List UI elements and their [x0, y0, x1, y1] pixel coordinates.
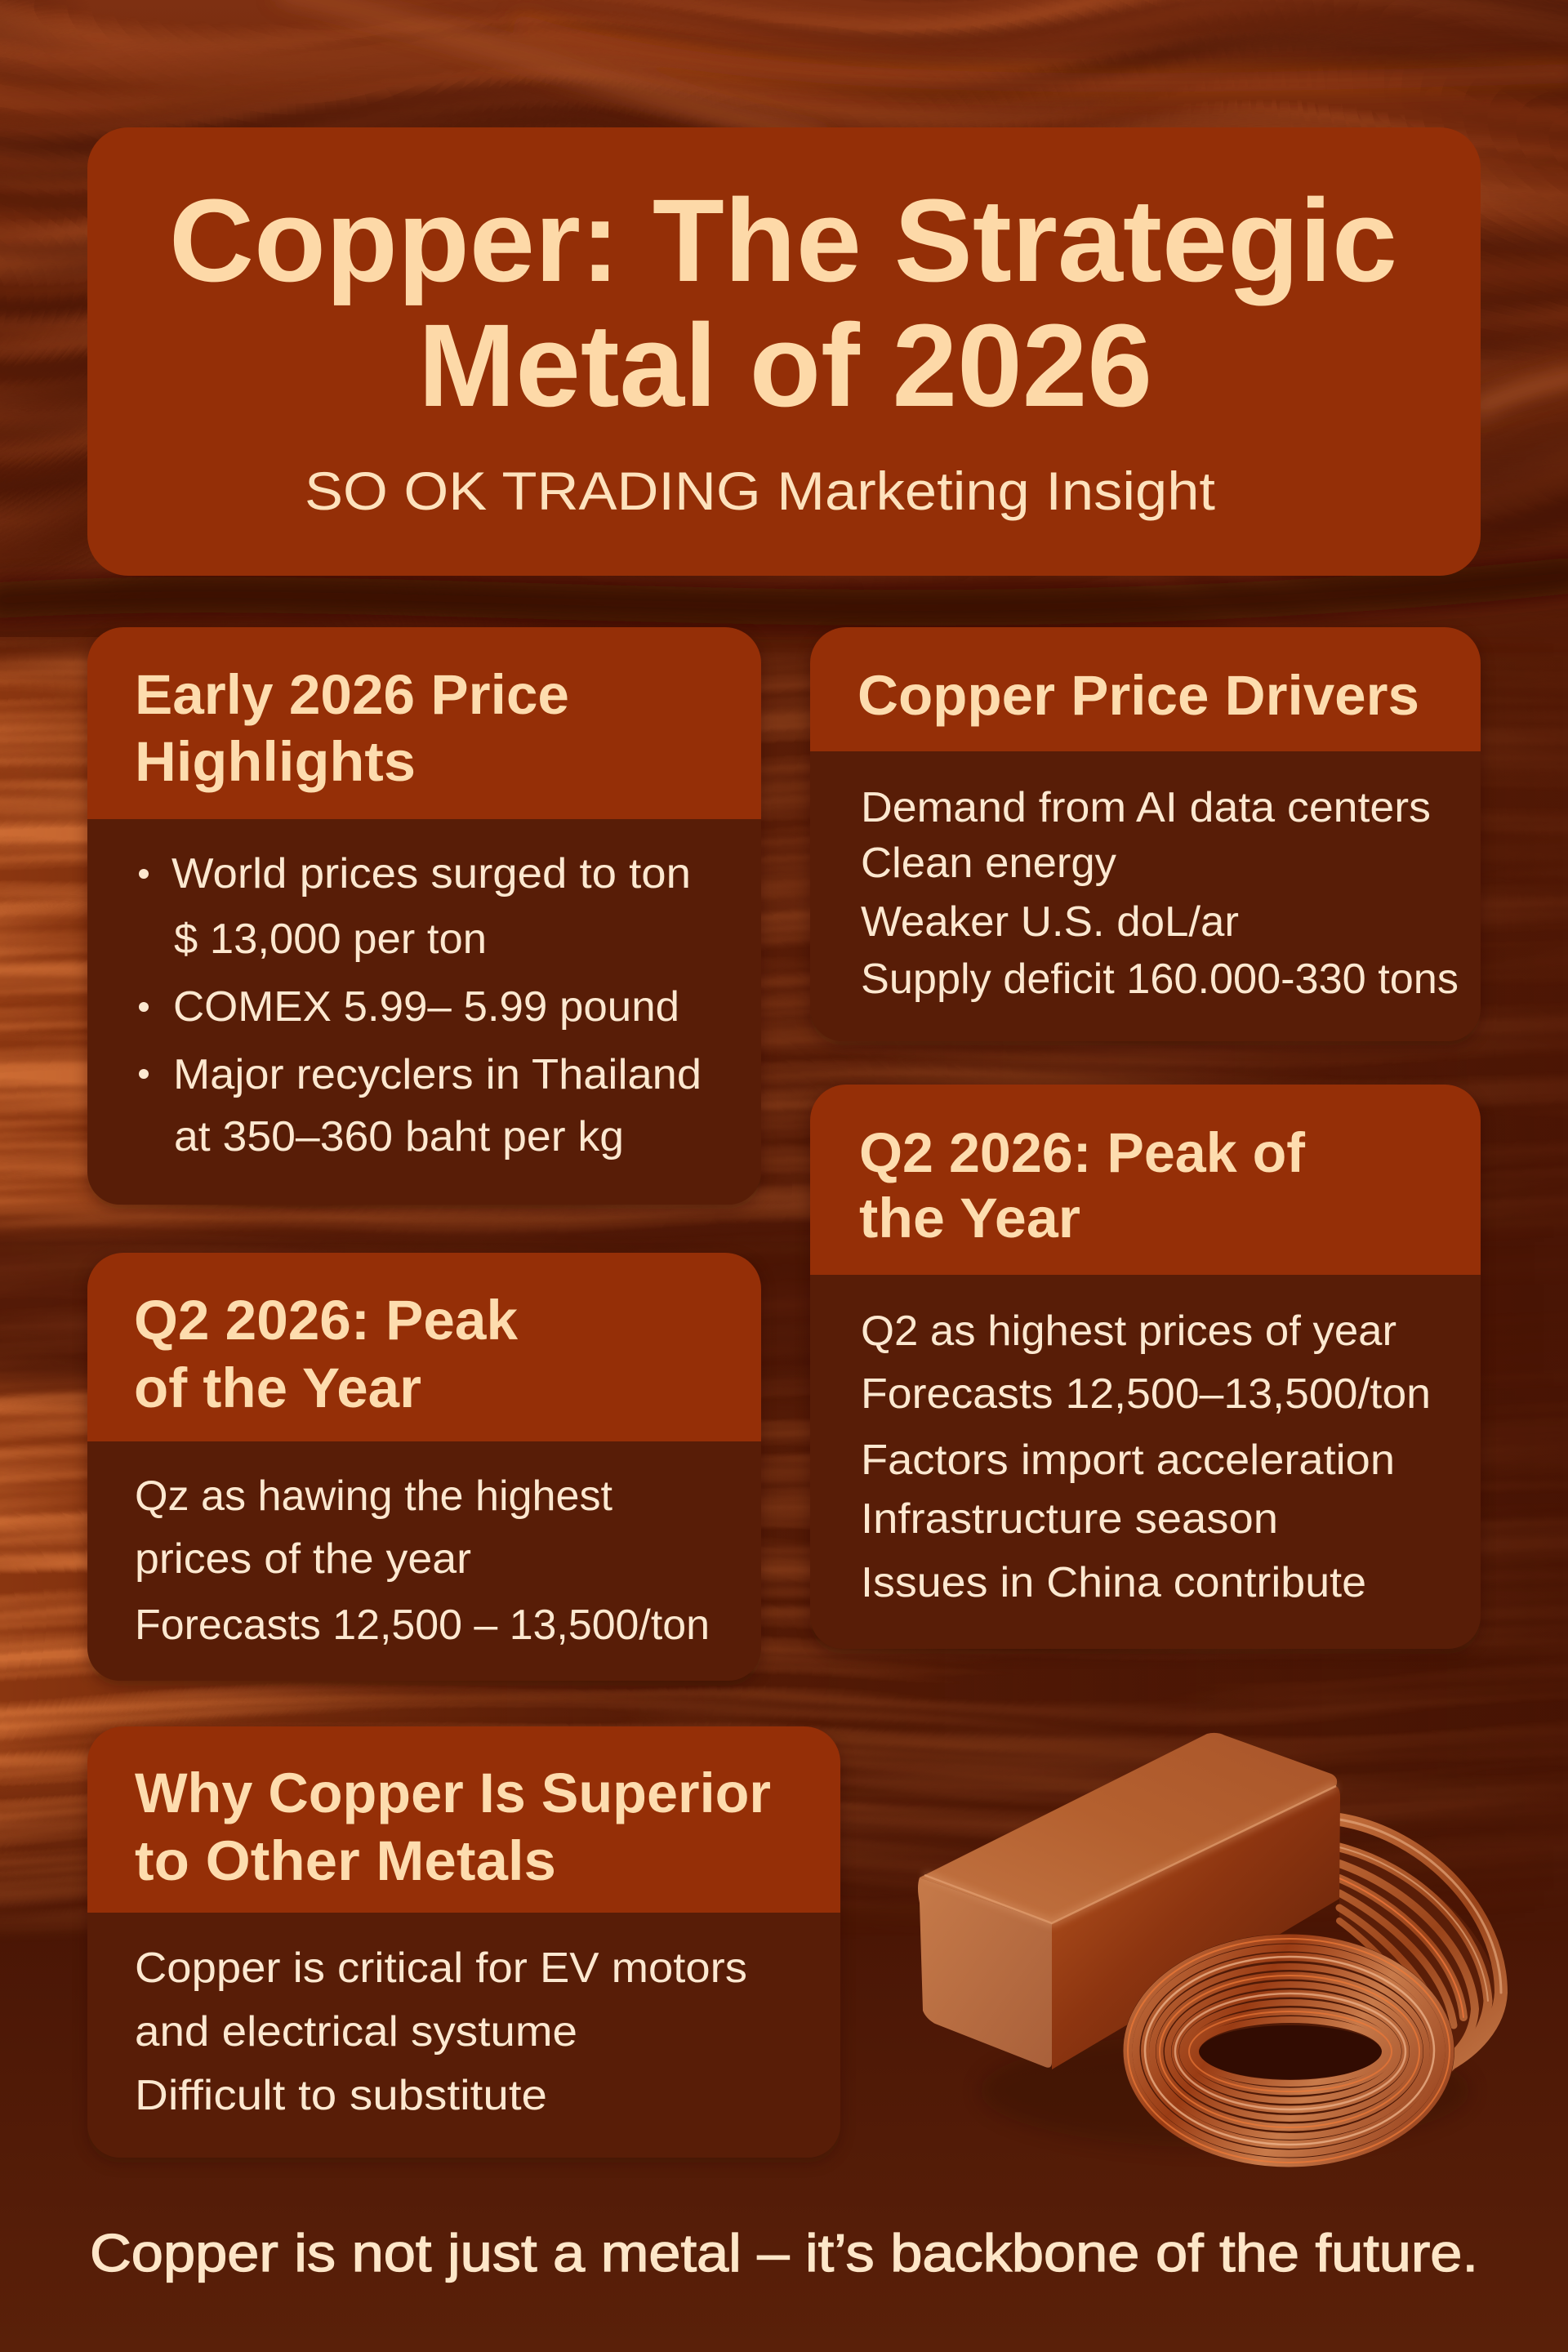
back coil	[1339, 1820, 1501, 2081]
driver list: Supply deficit 160.000-330 tons	[861, 956, 1459, 1003]
title line 2: Metal of 2026	[418, 300, 1152, 431]
forecast text: prices of the year	[135, 1535, 471, 1583]
closing statement: Copper is not just a metal – it’s backbone of the future.	[90, 2223, 1478, 2283]
bullet list: at 350–360 baht per kg	[174, 1113, 624, 1160]
panel: early 2026 price highlights	[87, 627, 761, 1209]
front coil	[1123, 1934, 1454, 2167]
forecast list: Issues in China contribute	[861, 1559, 1366, 1606]
heading: early 2026 price highlights: Early 2026 Price	[135, 663, 569, 726]
forecast text: Forecasts 12,500 – 13,500/ton	[135, 1601, 710, 1649]
driver list	[861, 784, 1459, 1003]
title panel	[87, 127, 1481, 576]
panel: copper price drivers	[810, 627, 1481, 1045]
forecast list: Forecasts 12,500–13,500/ton	[861, 1370, 1431, 1418]
bullet list: Major recyclers in Thailand	[173, 1051, 702, 1098]
panel: why copper is superior	[87, 1726, 840, 2163]
heading: Q2 2026 peak of the year: Q2 2026: Peak of	[859, 1121, 1306, 1184]
bullet list: COMEX 5.99– 5.99 pound	[173, 983, 679, 1031]
illustration: copper bar and coiled wire	[918, 1733, 1501, 2167]
panel: Q2 2026 peak of the year (left)	[87, 1253, 761, 1686]
forecast list: Q2 as highest prices of year	[861, 1307, 1396, 1355]
driver list: Demand from AI data centers	[861, 784, 1431, 831]
superiority text	[135, 1944, 747, 2119]
heading: early 2026 price highlights: Highlights	[135, 730, 416, 793]
superiority text: Difficult to substitute	[135, 2072, 547, 2119]
driver list: Clean energy	[861, 840, 1116, 887]
forecast list: Factors import acceleration	[861, 1437, 1395, 1484]
heading: why copper is superior: to Other Metals	[135, 1829, 556, 1892]
superiority text: and electrical systume	[135, 2008, 577, 2056]
bullet list: World prices surged to ton	[172, 850, 691, 898]
title line 1: Copper: The Strategic	[169, 175, 1397, 306]
forecast text	[135, 1472, 710, 1649]
forecast list	[861, 1307, 1431, 1606]
heading: Q2 2026 peak of the year: Q2 2026: Peak	[134, 1289, 519, 1352]
heading: Q2 2026 peak of the year: of the Year	[134, 1356, 421, 1419]
superiority text: Copper is critical for EV motors	[135, 1944, 747, 1992]
copper bar	[918, 1733, 1340, 2069]
heading: Q2 2026 peak of the year: the Year	[859, 1187, 1080, 1250]
panel: Q2 2026 peak of the year (right)	[810, 1085, 1481, 1654]
bullet list: $ 13,000 per ton	[174, 915, 487, 963]
bullet list	[139, 850, 702, 1160]
heading: copper price drivers: Copper Price Drivers	[858, 664, 1419, 727]
subtitle: SO OK TRADING Marketing Insight	[305, 461, 1215, 521]
forecast text: Qz as hawing the highest	[135, 1472, 613, 1520]
driver list: Weaker U.S. doL/ar	[861, 898, 1239, 946]
forecast list: Infrastructure season	[861, 1495, 1278, 1543]
heading: why copper is superior: Why Copper Is Superior	[135, 1762, 771, 1824]
